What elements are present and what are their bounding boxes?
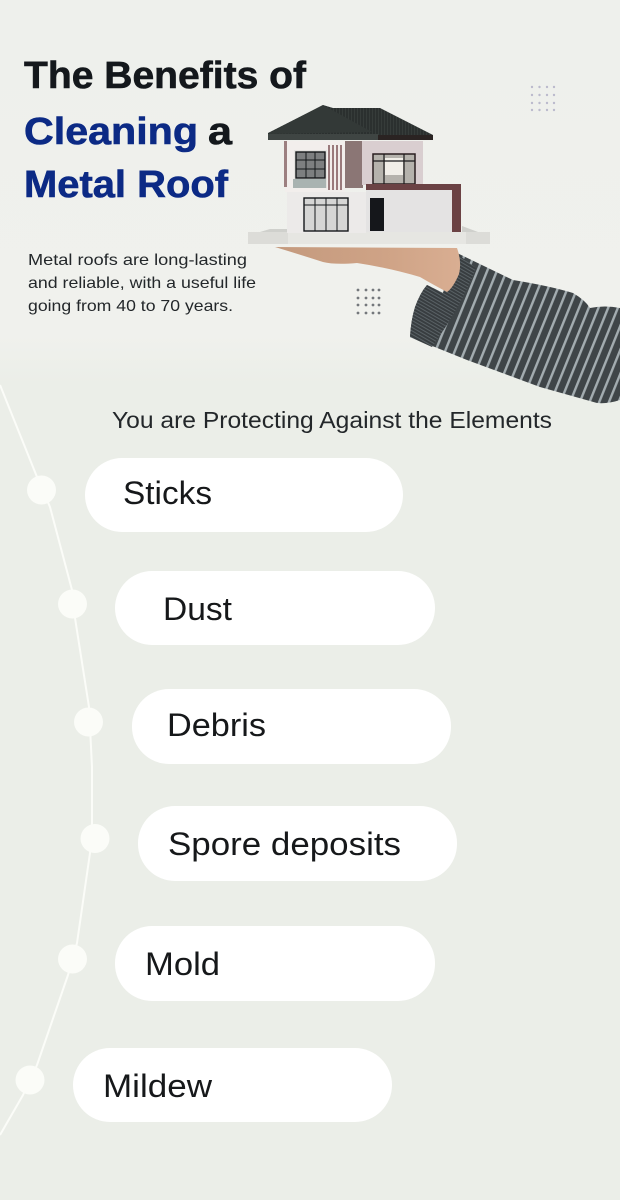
illustration: hand bbox=[275, 247, 460, 292]
upper left window bbox=[293, 150, 327, 188]
timeline curve bbox=[0, 385, 92, 1135]
timeline node 5 bbox=[58, 944, 87, 974]
intro text: Metal roofs are long-lasting bbox=[28, 252, 247, 269]
pill: Dust bbox=[115, 571, 435, 645]
pill: Sticks: Sticks bbox=[123, 475, 212, 511]
timeline node 4 bbox=[80, 824, 110, 853]
pill: Mildew bbox=[73, 1048, 392, 1122]
upper right window bbox=[373, 154, 415, 184]
house base bbox=[248, 232, 490, 244]
illustration: model house bbox=[248, 105, 490, 244]
timeline node 3 bbox=[74, 708, 103, 736]
intro text bbox=[28, 252, 256, 315]
pill: Debris: Debris bbox=[167, 707, 266, 743]
illustration: sleeve bbox=[410, 252, 620, 403]
decorative dot grid: top right bbox=[531, 86, 555, 111]
lower window bbox=[304, 198, 348, 231]
title: Cleaning bbox=[24, 111, 198, 153]
carport beam bbox=[366, 184, 461, 232]
section heading: You are Protecting Against the Elements bbox=[112, 407, 552, 433]
roof bbox=[268, 105, 433, 140]
pill: Spore deposits: Spore deposits bbox=[168, 826, 401, 862]
title: Metal Roof bbox=[24, 164, 228, 206]
pill: Dust: Dust bbox=[163, 591, 232, 627]
door bbox=[370, 198, 384, 231]
title: a bbox=[208, 111, 233, 153]
intro text: going from 40 to 70 years. bbox=[28, 298, 233, 315]
timeline node 2 bbox=[58, 590, 87, 618]
intro text: and reliable, with a useful life bbox=[28, 275, 256, 292]
pill: Mildew: Mildew bbox=[103, 1068, 213, 1104]
title bbox=[24, 55, 306, 206]
title: The Benefits of bbox=[24, 55, 306, 97]
decorative dot grid: by sleeve bbox=[357, 289, 380, 314]
pill: Mold: Mold bbox=[145, 946, 220, 982]
timeline node 1 bbox=[27, 476, 56, 504]
upper walls bbox=[285, 141, 345, 192]
pill: Debris bbox=[132, 689, 451, 764]
pill: Spore deposits bbox=[138, 806, 457, 881]
lower walls bbox=[287, 192, 366, 233]
pill: Sticks bbox=[85, 458, 403, 532]
timeline node 6 bbox=[16, 1066, 44, 1094]
sleeve cuff bbox=[410, 252, 476, 347]
pill: Mold bbox=[115, 926, 435, 1001]
vertical fins bbox=[329, 145, 341, 190]
